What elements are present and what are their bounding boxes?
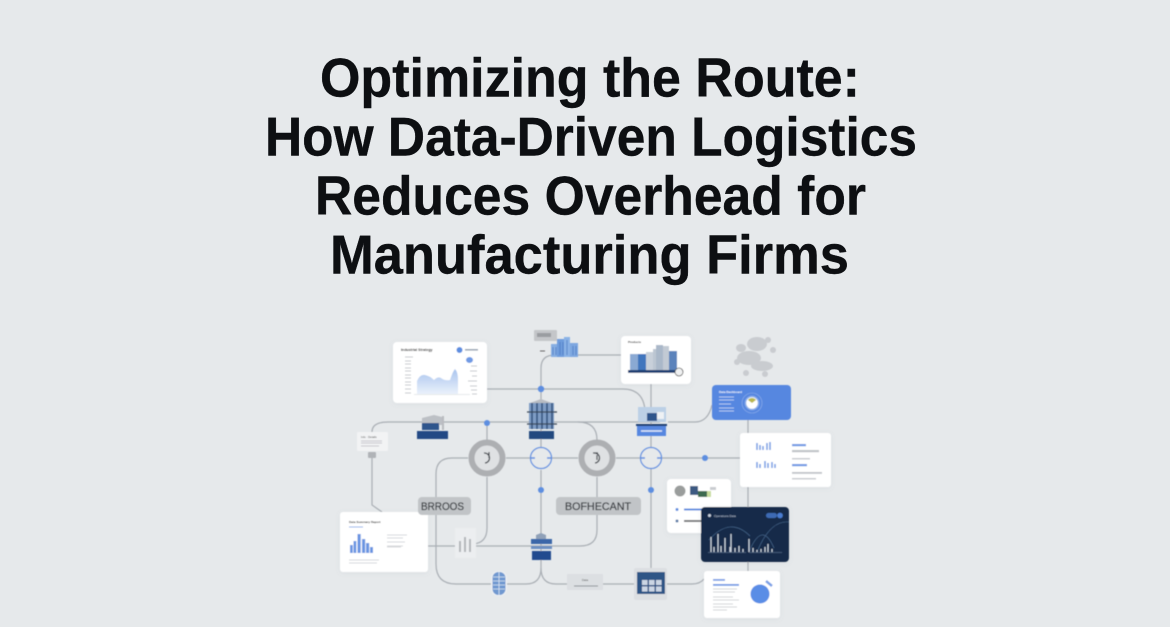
panel: bar chart card: Data Summary Report — [349, 520, 381, 524]
icon: right factory — [636, 407, 667, 436]
title: Optimizing the Route: — [320, 48, 860, 108]
blue ring junction right — [640, 448, 662, 468]
label: bottom small box: Data — [582, 578, 588, 582]
icon: bottom capsule — [491, 571, 507, 596]
gray dial left — [472, 442, 502, 474]
pill label left — [418, 497, 471, 515]
panel: blue circle report card — [704, 571, 780, 618]
title: Manufacturing Firms — [330, 224, 849, 286]
panel: blue donut card: Data Dashboard — [719, 390, 742, 394]
node dots — [484, 386, 708, 493]
panel: bar chart card — [340, 512, 428, 572]
title — [265, 48, 917, 286]
icon: lower ship stack — [531, 533, 552, 560]
panel: legend card — [667, 479, 731, 533]
icon: gray bar tile — [455, 528, 476, 558]
pill label right — [556, 497, 641, 515]
icon: monitor tile — [634, 568, 667, 600]
connector lines — [372, 355, 748, 584]
label: left node note — [357, 432, 388, 458]
panel: area chart card: Industrial Strategy — [401, 348, 433, 352]
icon: gray label and blue city — [534, 330, 578, 357]
panel: dark dashboard card — [701, 507, 789, 562]
panel: blue donut card — [712, 385, 791, 420]
icon: left machine — [417, 415, 448, 439]
title: Reduces Overhead for — [315, 166, 866, 226]
blue ring junction left — [530, 448, 552, 468]
gray dial right — [582, 442, 612, 474]
panel: factory skyline card — [621, 336, 691, 384]
panel: dark dashboard card: Operations Data — [714, 514, 736, 518]
pill label left: BRROOS — [421, 501, 464, 513]
pill label right: BOFHECANT — [565, 501, 631, 513]
label: bottom small box — [567, 574, 603, 590]
icon: gray world blob — [734, 337, 776, 377]
network diagram — [340, 330, 831, 618]
label: left node note: Info · Details — [361, 435, 377, 439]
title: How Data-Driven Logistics — [265, 106, 917, 168]
panel: small bars card — [740, 433, 831, 487]
icon: central tower — [527, 399, 557, 439]
panel: factory skyline card: Products — [628, 340, 641, 344]
panel: area chart card — [393, 342, 487, 403]
